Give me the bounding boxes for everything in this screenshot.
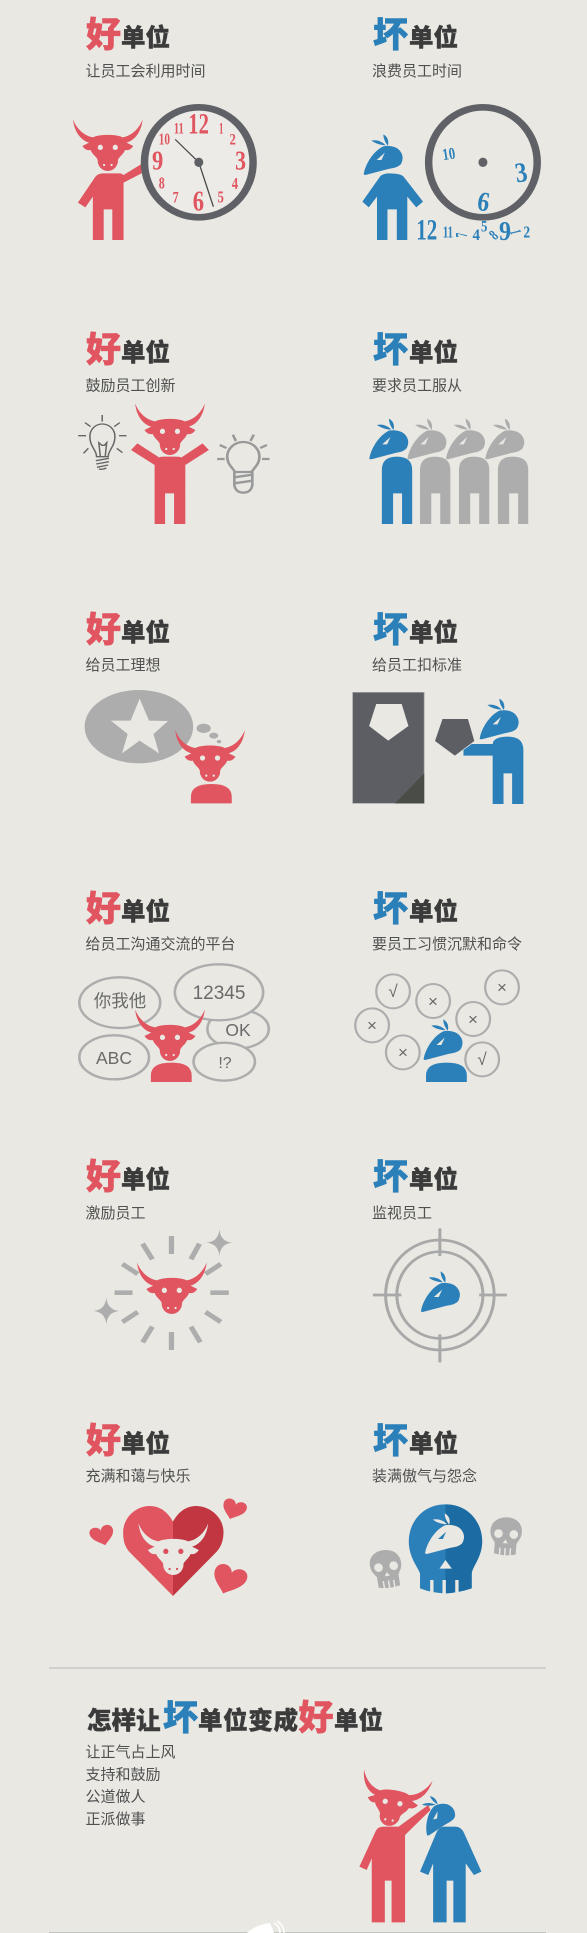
fallen numerals <box>416 144 530 247</box>
advice list: 公道做人 <box>86 1789 146 1806</box>
heading: 好 <box>86 890 121 929</box>
heading: 单位 <box>121 1165 170 1194</box>
heading: 坏 <box>163 1699 198 1738</box>
subtitle: 浪费员工时间 <box>372 63 462 80</box>
subtitle: 给员工扣标准 <box>372 657 462 674</box>
blue figure <box>413 1791 481 1922</box>
fallen numerals: 9 <box>499 216 511 247</box>
heading <box>373 16 458 55</box>
big blue skull <box>409 1504 482 1594</box>
illustration: figure and broken clock <box>362 107 537 247</box>
circles <box>355 970 519 1076</box>
icon: thin light bulb <box>78 415 127 469</box>
check and cross marks: × <box>398 1043 408 1062</box>
heading <box>86 890 170 929</box>
illustration: crosshair target <box>373 1228 507 1362</box>
clock: 10 <box>159 130 170 148</box>
subtitle: 鼓励员工创新 <box>86 378 176 394</box>
big heart <box>123 1506 223 1596</box>
heading <box>87 1699 383 1738</box>
bull figure <box>135 1009 205 1082</box>
heading <box>373 611 458 650</box>
heading: 单位 <box>121 338 170 367</box>
fallen numerals: 11 <box>443 222 453 241</box>
heading: 坏 <box>373 331 408 370</box>
advice list <box>86 1744 176 1828</box>
check and cross marks: √ <box>388 982 398 1001</box>
bubble labels: ABC <box>96 1048 132 1068</box>
heading: 好 <box>86 1422 121 1461</box>
panel: bad unit, silence <box>355 890 522 1082</box>
check and cross marks: × <box>428 992 438 1011</box>
bag head <box>421 1271 460 1312</box>
clock: 9 <box>152 146 163 176</box>
subtitle: 监视员工 <box>372 1205 432 1222</box>
panel: good unit, joy <box>86 1422 250 1599</box>
illustration: pentagon hole and figure <box>353 692 523 804</box>
clock: 4 <box>232 174 238 193</box>
crosshair <box>373 1228 507 1362</box>
heading: 好 <box>86 611 121 650</box>
clock <box>145 107 253 217</box>
pentagon block <box>435 719 474 756</box>
bull figure <box>354 1769 433 1922</box>
illustration: hearts and bull <box>88 1497 250 1599</box>
illustration: bull dreaming of a star <box>85 690 245 803</box>
panel: good unit, communication <box>79 890 269 1082</box>
panel: good unit, motivation <box>86 1158 232 1350</box>
heading: 好 <box>86 1158 121 1197</box>
fallen numerals: 10 <box>441 144 457 164</box>
subtitle: 给员工理想 <box>86 657 161 674</box>
fallen numerals: 8 <box>486 228 502 243</box>
illustration: bull and clock <box>73 107 253 240</box>
clock: 6 <box>193 186 204 217</box>
heading: 单位 <box>409 897 458 926</box>
fallen numerals: 5 <box>481 218 487 235</box>
divider <box>49 1668 546 1669</box>
heading: 单位变成 <box>198 1706 298 1735</box>
heading <box>86 331 170 370</box>
illustration: bull with light bulbs <box>78 403 270 524</box>
heading <box>86 1422 170 1461</box>
fallen numerals: 7 <box>453 233 471 237</box>
bull figure <box>131 403 209 524</box>
grey skulls <box>489 1516 523 1557</box>
bull head <box>137 1262 207 1314</box>
illustration: bull helping figure <box>354 1769 481 1922</box>
clock: 5 <box>218 187 224 206</box>
heading: 坏 <box>373 1422 408 1461</box>
heading: 好 <box>298 1699 334 1738</box>
check and cross marks: × <box>367 1016 377 1035</box>
blue figure <box>424 1019 467 1082</box>
panel: bad unit, standard <box>353 611 523 804</box>
fallen numerals: 1 <box>506 228 524 236</box>
clock: 3 <box>235 146 246 176</box>
small hearts <box>88 1497 250 1599</box>
icon: grey light bulb <box>217 435 270 493</box>
advice list: 支持和鼓励 <box>86 1766 161 1784</box>
heading <box>86 16 170 55</box>
heading: 坏 <box>373 611 408 650</box>
clock: 2 <box>229 130 236 148</box>
advice list: 正派做事 <box>86 1811 146 1828</box>
panel: how to turn bad into good <box>86 1699 481 1922</box>
subtitle: 充满和蔼与快乐 <box>86 1468 191 1485</box>
bubble labels: 12345 <box>193 983 245 1004</box>
heading: 单位 <box>121 897 170 926</box>
illustration: radiant bull <box>93 1229 232 1350</box>
bubble labels <box>94 983 251 1072</box>
heading: 坏 <box>373 1158 408 1197</box>
illustration: row of identical figures <box>369 419 528 524</box>
thought bubble with star <box>85 690 221 763</box>
illustration: speech bubbles <box>79 964 269 1082</box>
heading <box>373 1158 458 1197</box>
bull figure <box>175 730 245 803</box>
heading: 坏 <box>373 890 408 929</box>
check and cross marks <box>367 978 507 1069</box>
heading: 好 <box>86 331 121 370</box>
bubble labels: !? <box>218 1055 232 1072</box>
heading <box>86 1158 170 1197</box>
fallen numerals: 12 <box>416 213 437 246</box>
wall with pentagon hole <box>353 692 424 803</box>
clock: 8 <box>159 173 165 192</box>
sparkles <box>93 1229 232 1324</box>
check and cross marks: × <box>497 978 507 997</box>
heading: 单位 <box>121 618 170 647</box>
heading: 单位 <box>334 1706 383 1735</box>
bull head <box>139 1523 208 1575</box>
subtitle: 让员工会利用时间 <box>86 63 206 80</box>
heading: 单位 <box>121 23 170 52</box>
clock: 7 <box>173 188 179 206</box>
check and cross marks: × <box>468 1010 478 1029</box>
clock: 11 <box>174 119 184 137</box>
blue figure <box>463 699 523 804</box>
heading: 单位 <box>121 1429 170 1458</box>
blue figure <box>362 134 423 240</box>
fallen numerals: 2 <box>523 222 530 241</box>
subtitle: 激励员工 <box>86 1205 146 1222</box>
fallen numerals: 3 <box>513 157 530 189</box>
speech bubble outlines <box>79 964 269 1081</box>
heading <box>373 331 458 370</box>
heading: 单位 <box>409 1165 458 1194</box>
panel: bad unit, obedience <box>369 331 528 524</box>
advice list: 让正气占上风 <box>86 1744 176 1761</box>
heading: 好 <box>86 16 121 55</box>
panel: bad unit, time <box>362 16 537 247</box>
heading: 单位 <box>409 23 458 52</box>
subtitle: 装满傲气与怨念 <box>372 1467 477 1485</box>
clock: 12 <box>188 107 209 140</box>
heading <box>373 890 458 929</box>
illustration: skulls <box>368 1504 523 1594</box>
check and cross marks: √ <box>477 1050 487 1069</box>
grey figures <box>407 419 528 524</box>
blue figure <box>369 419 412 524</box>
heading: 单位 <box>409 338 458 367</box>
bull figure <box>73 119 143 240</box>
panel: bad unit, surveillance <box>372 1158 507 1362</box>
subtitle: 给员工沟通交流的平台 <box>86 935 236 953</box>
fallen numerals: 6 <box>475 187 492 218</box>
bottom rule and watermark <box>49 1921 546 1933</box>
bubble labels: OK <box>225 1020 251 1040</box>
panel: good unit, ideals <box>85 611 245 803</box>
rays <box>115 1236 229 1350</box>
illustration: figure with marks <box>355 970 519 1082</box>
fallen numerals: 4 <box>472 226 480 244</box>
panel: good unit, time <box>73 16 253 240</box>
heading: 怎样让 <box>87 1707 160 1735</box>
panel: bad unit, resentment <box>368 1422 523 1594</box>
heading: 单位 <box>409 1429 458 1458</box>
empty clock <box>429 107 537 217</box>
bubble labels: 你我他 <box>94 991 146 1011</box>
heading: 单位 <box>409 618 458 647</box>
panel: good unit, innovation <box>78 331 270 524</box>
heading: 坏 <box>373 16 408 55</box>
subtitle: 要求员工服从 <box>372 378 462 394</box>
clock: 1 <box>219 119 223 137</box>
heading <box>86 611 170 650</box>
subtitle: 要员工习惯沉默和命令 <box>372 935 522 953</box>
heading <box>373 1422 458 1461</box>
